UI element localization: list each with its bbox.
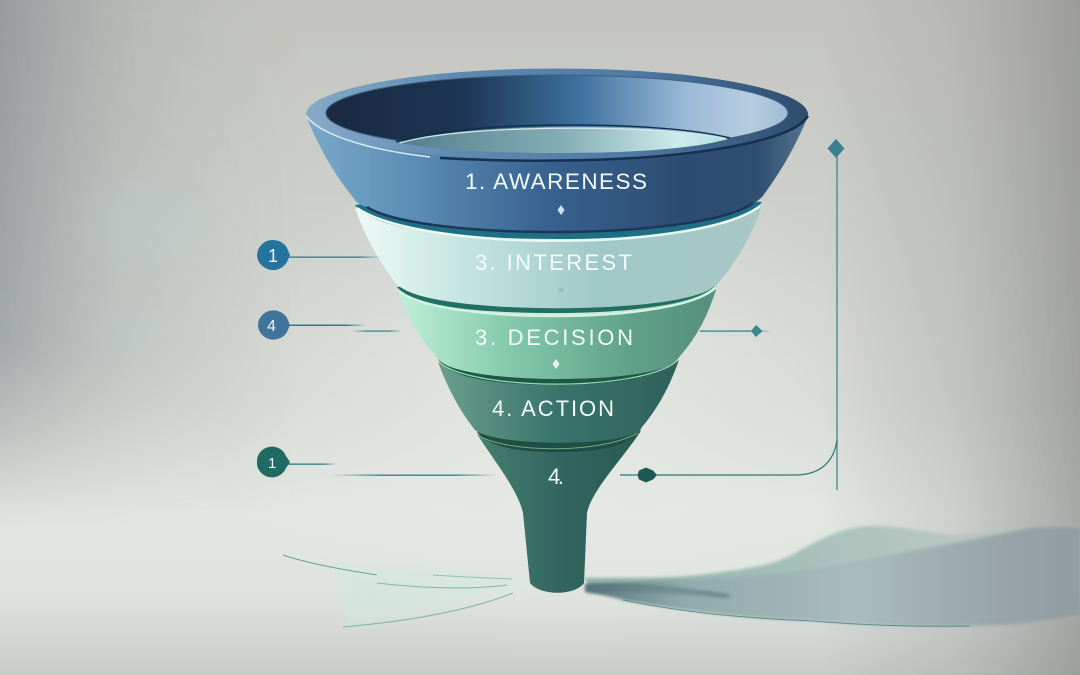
- inner disc: [400, 127, 728, 153]
- inner wall: [326, 75, 788, 151]
- label: 4.: 4.: [548, 464, 564, 489]
- bottom left green lines: [283, 555, 530, 627]
- funnel stage 1: awareness bowl: [306, 68, 808, 232]
- callout left 2: [258, 310, 402, 340]
- funnel stage 3: decision: [397, 281, 717, 379]
- funnel stage 4: action: [438, 353, 679, 443]
- badge: 1: [268, 246, 278, 266]
- callout left 1: [257, 240, 382, 270]
- rim: [306, 68, 808, 160]
- connector right: long bracket: [620, 139, 844, 490]
- label: 3. DECISION: 3. DECISION: [475, 325, 633, 350]
- lower diamond: [638, 468, 657, 482]
- callout left 3: [257, 447, 498, 477]
- funnel stage 5: spout: [477, 426, 641, 593]
- marker diamond: [552, 359, 560, 369]
- connector right: decision marker: [700, 325, 772, 337]
- funnel stage 2: interest: [355, 199, 762, 308]
- bottom right wave shadow: [585, 524, 1080, 627]
- funnel: [306, 68, 808, 593]
- badge: 1: [268, 455, 276, 472]
- label: 1. AWARENESS: 1. AWARENESS: [465, 169, 647, 194]
- badge: 4: [267, 318, 276, 335]
- label: 3. INTEREST: 3. INTEREST: [475, 250, 632, 275]
- label: 4. ACTION: 4. ACTION: [492, 396, 614, 421]
- marker diamond: [558, 205, 564, 215]
- badge: [257, 447, 290, 477]
- top diamond: [828, 139, 844, 158]
- marker dot: [558, 288, 564, 292]
- badge: [258, 310, 290, 340]
